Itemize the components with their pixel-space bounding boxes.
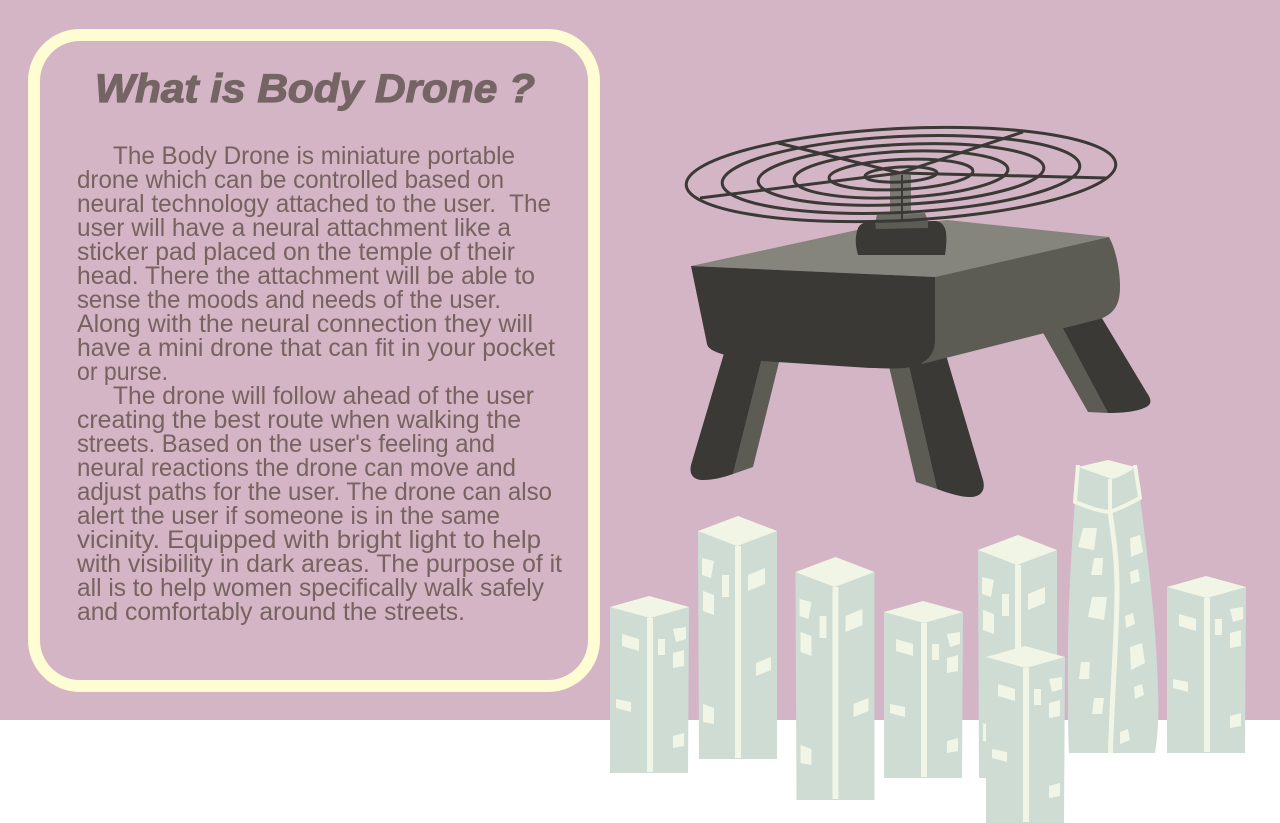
building 4 — [884, 601, 963, 778]
building 1 — [610, 596, 689, 773]
building 6 — [986, 646, 1065, 823]
body text: streets. Based on the user's feeling and — [77, 430, 495, 458]
illustration: drone — [684, 118, 1150, 497]
title: What is Body Drone ? — [95, 67, 535, 111]
building 2 — [698, 516, 777, 759]
body text: drone which can be controlled based on — [77, 166, 504, 194]
body text: neural reactions the drone can move and — [77, 454, 516, 482]
body text: vicinity. Equipped with bright light to help — [77, 526, 541, 554]
body text: sense the moods and needs of the user. — [77, 286, 501, 314]
building 3 — [796, 557, 874, 800]
building 7 — [1167, 576, 1246, 753]
body text: adjust paths for the user. The drone can also — [77, 478, 552, 506]
body text: creating the best route when walking the — [77, 406, 521, 434]
body text: sticker pad placed on the temple of their — [77, 238, 515, 266]
body text: head. There the attachment will be able to — [77, 262, 535, 290]
drone body right face — [915, 237, 1120, 364]
drone hub — [856, 221, 946, 255]
body text: neural technology attached to the user. The — [77, 190, 551, 218]
drone body top face — [691, 220, 1109, 277]
panel: description card — [34, 35, 594, 686]
curved tower — [1068, 460, 1158, 753]
body text: The Body Drone is miniature portable — [113, 142, 515, 170]
body text: user will have a neural attachment like a — [77, 214, 511, 242]
body text: alert the user if someone is in the same — [77, 502, 500, 530]
rotor mount — [875, 175, 928, 229]
body text: all is to help women specifically walk safely — [77, 574, 544, 602]
rotor cage — [684, 118, 1118, 231]
drone legs — [690, 315, 1150, 497]
drone body front face — [691, 266, 935, 368]
body text: with visibility in dark areas. The purpose of it — [76, 550, 562, 578]
illustration: city skyline — [610, 460, 1246, 823]
body text: The drone will follow ahead of the user — [113, 382, 534, 410]
card frame — [34, 35, 594, 686]
body text: have a mini drone that can fit in your pocket — [77, 334, 555, 362]
body text — [76, 142, 562, 626]
body text: and comfortably around the streets. — [77, 598, 465, 626]
building 5 — [978, 535, 1057, 778]
body text: or purse. — [77, 358, 168, 386]
body text: Along with the neural connection they will — [77, 310, 533, 338]
